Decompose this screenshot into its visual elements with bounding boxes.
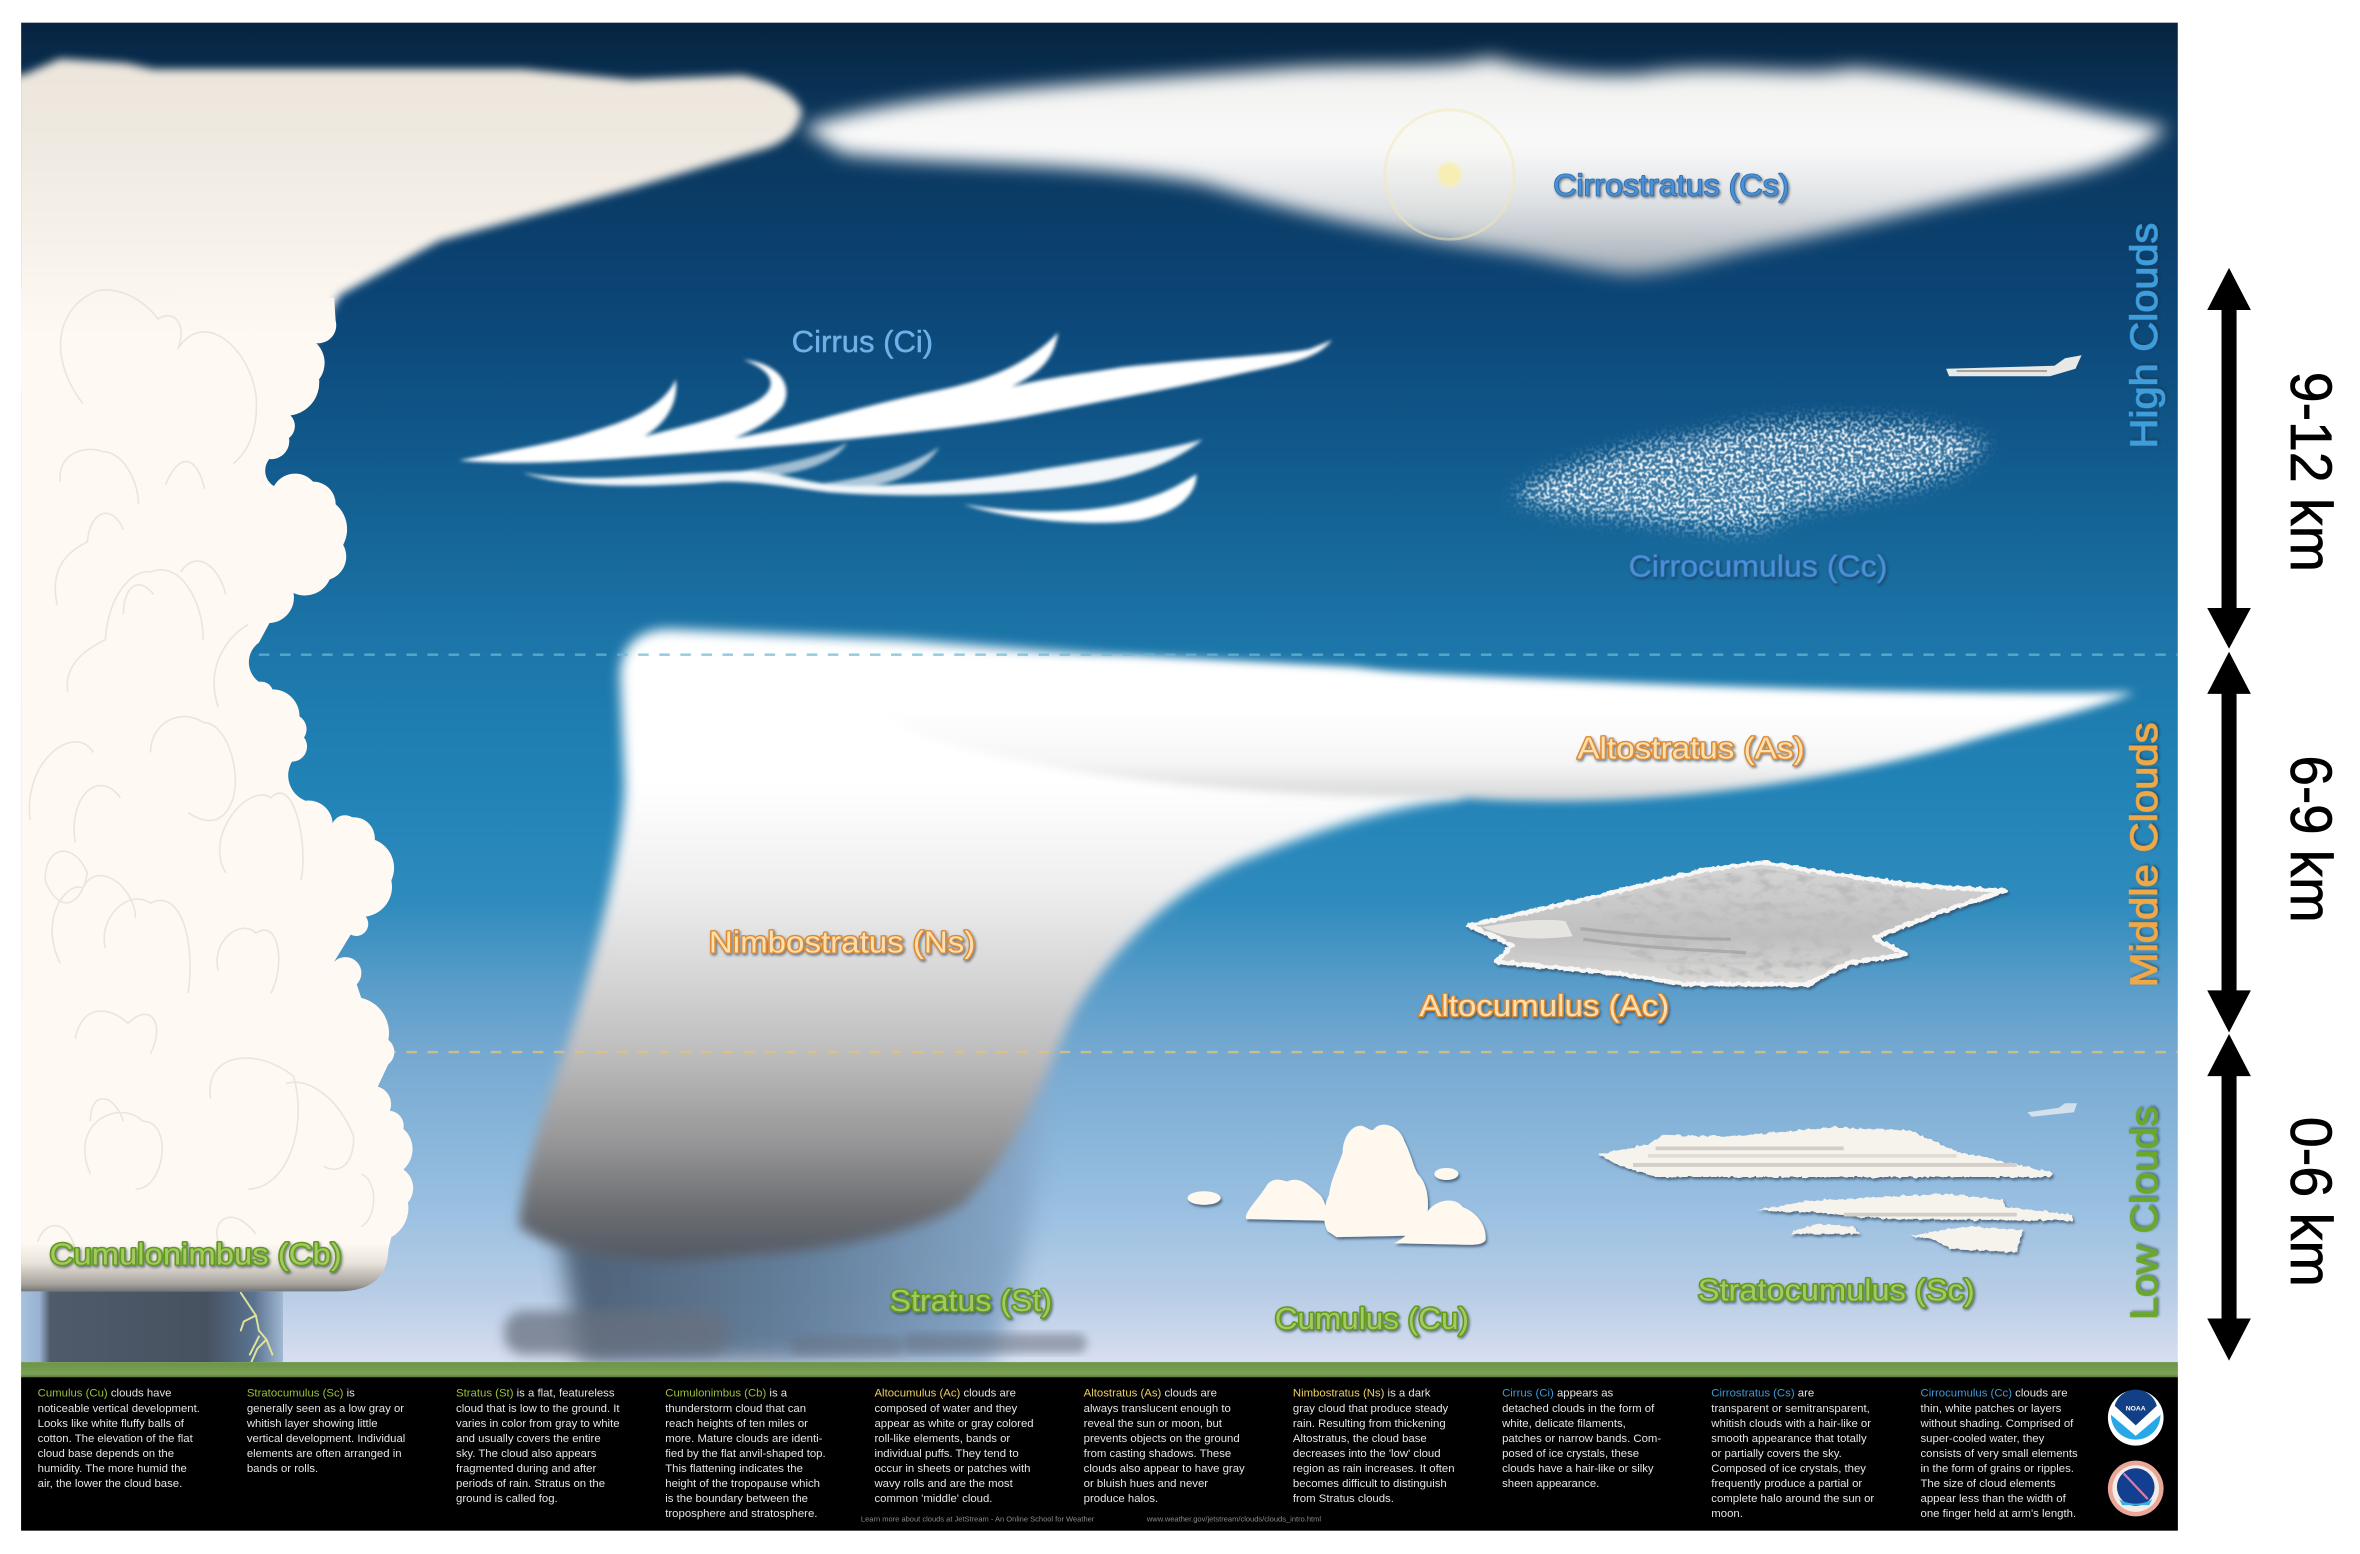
text: Cumulonimbus: height of the tropopause which <box>665 1478 820 1490</box>
text: Altostratus: always translucent enough to <box>1084 1403 1231 1415</box>
text: Cumulonimbus: This flattening indicates the <box>665 1463 803 1475</box>
cirrocumulus cloud <box>1513 420 1987 530</box>
text: Cumulus: cotton. The elevation of the flat <box>38 1433 194 1445</box>
text: Cumulonimbus: fied by the flat anvil-shaped top. <box>665 1448 826 1460</box>
text: Cirrostratus: Cirrostratus (Cs) <box>1711 1388 1795 1400</box>
text: Cirrus: clouds have a hair-like or silky <box>1502 1463 1654 1475</box>
text: Nimbostratus: Altostratus, the cloud base <box>1293 1433 1427 1445</box>
text: Nimbostratus: region as rain increases. It often <box>1293 1463 1455 1475</box>
text: Stratocumulus: generally seen as a low gray or <box>247 1403 404 1415</box>
label: 0-6 km: 0-6 km <box>2278 1117 2343 1287</box>
text: Stratus: and usually covers the entire <box>456 1433 601 1445</box>
text: Nimbostratus: from Stratus clouds. <box>1293 1493 1394 1505</box>
text: Cirrus: patches or narrow bands. Com- <box>1502 1433 1661 1445</box>
icon: NOAA logo <box>2108 1390 2164 1446</box>
cirrus cloud <box>459 333 1332 523</box>
text: Stratus: ground is called fog. <box>456 1493 558 1505</box>
stratus wisps <box>504 1311 1087 1355</box>
label: Cumulonimbus: Cumulonimbus (Cb) <box>50 1238 342 1271</box>
label: Low Clouds: Low Clouds <box>2123 1106 2165 1320</box>
small puff left <box>1188 1191 1221 1205</box>
cumulonimbus tower <box>0 286 413 1291</box>
text: Cumulus: noticeable vertical development. <box>38 1403 200 1415</box>
label: Cirrus: Cirrus (Ci) <box>792 326 933 359</box>
base shading band <box>21 1249 388 1292</box>
text: Cirrocumulus: in the form of grains or ripples. <box>1921 1463 2074 1475</box>
text: Nimbostratus: decreases into the 'low' cloud <box>1293 1448 1441 1460</box>
text: Cumulus: humidity. The more humid the <box>38 1463 187 1475</box>
label: Nimbostratus: Nimbostratus (Ns) <box>709 927 975 960</box>
text: Cumulonimbus: is a <box>766 1388 788 1400</box>
icon: small airplane <box>2027 1103 2077 1117</box>
cirrostratus cloud <box>802 57 2167 274</box>
text: Cirrocumulus: The size of cloud elements <box>1921 1478 2056 1490</box>
arrow: 0-6 km range <box>2207 1034 2251 1361</box>
text: Stratus: is a flat, featureless <box>514 1388 615 1400</box>
text: Cirrus: white, delicate filaments, <box>1501 1418 1626 1430</box>
text: Altocumulus: common 'middle' cloud. <box>874 1493 992 1505</box>
text: Cumulonimbus: is the boundary between the <box>665 1493 808 1505</box>
text: Cumulus: clouds have <box>108 1388 172 1400</box>
billow outlines <box>29 290 374 1249</box>
nimbostratus cloud <box>519 629 1505 1261</box>
cumulonimbus anvil <box>0 59 802 391</box>
text: Cumulonimbus: reach heights of ten miles or <box>665 1418 808 1430</box>
central tower <box>1324 1125 1428 1237</box>
text: Altocumulus: individual puffs. They tend to <box>874 1448 1019 1460</box>
text: Altocumulus: occur in sheets or patches with <box>874 1463 1030 1475</box>
label: Cumulus: Cumulus (Cu) <box>1275 1303 1469 1336</box>
text: Cirrostratus: smooth appearance that totally <box>1711 1433 1867 1445</box>
text: Altostratus: reveal the sun or moon, but <box>1084 1418 1223 1430</box>
text: Stratus: varies in color from gray to white <box>456 1418 620 1430</box>
dashed line: middle and low boundary <box>27 1051 2178 1053</box>
text: Stratus: sky. The cloud also appears <box>456 1448 597 1460</box>
text: Stratocumulus: vertical development. Individual <box>247 1433 405 1445</box>
panel: cloud descriptions <box>21 1377 2178 1531</box>
text: Altocumulus: composed of water and they <box>874 1403 1017 1415</box>
icon: lightning bolt <box>241 1293 272 1362</box>
dashed line: high and middle boundary <box>27 654 2178 656</box>
text: Altostratus: from casting shadows. These <box>1084 1448 1231 1460</box>
description background <box>21 1377 2178 1531</box>
label: Altostratus: Altostratus (As) <box>1577 733 1805 766</box>
text: Cirrostratus: frequently produce a partial or <box>1711 1478 1862 1490</box>
cumulonimbus dark base <box>21 1291 283 1362</box>
text: Cumulus: Looks like white fluffy balls of <box>38 1418 185 1430</box>
text: Cirrus: Cirrus (Ci) <box>1502 1388 1554 1400</box>
text: Altocumulus: Altocumulus (Ac) <box>874 1388 961 1400</box>
text: Altocumulus: wavy rolls and are the most <box>873 1478 1014 1490</box>
arrow: 9-12 km range <box>2207 268 2251 649</box>
text: Cirrostratus: are <box>1795 1388 1814 1400</box>
sky background <box>21 23 2178 1362</box>
stratocumulus clouds <box>1598 1127 2073 1252</box>
text: Cirrocumulus: Cirrocumulus (Cc) <box>1921 1388 2012 1400</box>
text: Nimbostratus: rain. Resulting from thickening <box>1293 1418 1446 1430</box>
label: Stratocumulus: Stratocumulus (Sc) <box>1698 1274 1975 1307</box>
label: High Clouds: High Clouds <box>2123 223 2165 449</box>
icon: National Weather Service logo <box>2108 1461 2164 1516</box>
label: Altocumulus: Altocumulus (Ac) <box>1419 990 1669 1023</box>
text: Stratocumulus: elements are often arranged in <box>247 1448 402 1460</box>
left cumulus <box>1246 1180 1326 1221</box>
text: Cirrostratus: complete halo around the sun or <box>1711 1493 1874 1505</box>
text: Stratocumulus: Stratocumulus (Sc) <box>247 1388 344 1400</box>
text: Cirrostratus: whitish clouds with a hair-like or <box>1710 1418 1871 1430</box>
text: Altostratus: Altostratus (As) <box>1084 1388 1162 1400</box>
text: Altostratus: prevents objects on the ground <box>1084 1433 1240 1445</box>
text: Cumulus: Cumulus (Cu) <box>38 1388 108 1400</box>
text: Stratus: fragmented during and after <box>456 1463 596 1475</box>
text: Altostratus: clouds also appear to have gray <box>1084 1463 1245 1475</box>
text: Nimbostratus: gray cloud that produce steady <box>1293 1403 1449 1415</box>
right cumulus <box>1394 1201 1486 1245</box>
text: Nimbostratus: becomes difficult to distinguish <box>1293 1478 1447 1490</box>
text: Altocumulus: roll-like elements, bands or <box>874 1433 1010 1445</box>
text: Cirrocumulus: clouds are <box>2012 1388 2068 1400</box>
text: Cumulonimbus: Cumulonimbus (Cb) <box>665 1388 766 1400</box>
text: Cumulonimbus: more. Mature clouds are identi- <box>665 1433 823 1445</box>
text: Nimbostratus: Nimbostratus (Ns) <box>1293 1388 1385 1400</box>
label: Middle Clouds: Middle Clouds <box>2123 722 2165 987</box>
text: Altocumulus: clouds are <box>960 1388 1016 1400</box>
text: Altocumulus: appear as white or gray colored <box>874 1418 1034 1430</box>
altostratus cloud <box>888 658 2134 801</box>
text: Cirrostratus: transparent or semitransparent, <box>1711 1403 1870 1415</box>
text: Stratocumulus: bands or rolls. <box>247 1463 318 1475</box>
text: Altostratus: or bluish hues and never <box>1084 1478 1208 1490</box>
cumulus clouds <box>1188 1125 1486 1245</box>
small puff right <box>1434 1168 1458 1180</box>
text: Cirrus: sheen appearance. <box>1502 1478 1599 1490</box>
text: Stratocumulus: is <box>343 1388 355 1400</box>
arrow: 6-9 km range <box>2207 652 2251 1032</box>
icon: jet airliner <box>1946 355 2082 376</box>
text: Stratus: periods of rain. Stratus on the <box>456 1478 605 1490</box>
text: learn more link: Learn more about clouds at JetStream - An Online School for Weather <box>861 1515 1095 1524</box>
text: Cirrostratus: Composed of ice crystals, they <box>1711 1463 1866 1475</box>
text: Altostratus: produce halos. <box>1084 1493 1158 1505</box>
panel: sky scene <box>0 23 2178 1362</box>
text: Cirrocumulus: super-cooled water, they <box>1921 1433 2045 1445</box>
text: Cirrus: appears as <box>1554 1388 1614 1400</box>
rain shaft under nimbostratus <box>546 1112 1040 1362</box>
label: 6-9 km: 6-9 km <box>2278 756 2343 923</box>
text: Nimbostratus: is a dark <box>1384 1388 1431 1400</box>
text: learn more link: www.weather.gov/jetstream/clouds/clouds_intro.html <box>1146 1515 1321 1524</box>
text: Cirrostratus: or partially covers the sky. <box>1711 1448 1842 1460</box>
text: Cirrocumulus: without shading. Comprised of <box>1920 1418 2074 1430</box>
label: Cirrostratus: Cirrostratus (Cs) <box>1553 170 1790 203</box>
text: Cirrocumulus: appear less than the width of <box>1921 1493 2067 1505</box>
text: Cumulonimbus: troposphere and stratosphere. <box>665 1508 817 1520</box>
altocumulus cloud <box>1469 862 2005 984</box>
text: Cirrocumulus: thin, white patches or layers <box>1921 1403 2062 1415</box>
icon: NOAA logo: NOAA <box>2126 1405 2146 1412</box>
text: Cirrocumulus: one finger held at arm's length. <box>1921 1508 2076 1520</box>
text: Altostratus: clouds are <box>1161 1388 1217 1400</box>
label: 9-12 km: 9-12 km <box>2278 372 2343 572</box>
label: Cirrocumulus: Cirrocumulus (Cc) <box>1629 550 1887 583</box>
ground strip <box>21 1362 2178 1377</box>
label: Stratus: Stratus (St) <box>890 1285 1052 1318</box>
text: Cirrus: posed of ice crystals, these <box>1502 1448 1639 1460</box>
text: Cirrus: detached clouds in the form of <box>1502 1403 1655 1415</box>
cloud name labels <box>50 170 1975 1336</box>
icon: sun halo <box>1385 110 1514 239</box>
text: Stratus: Stratus (St) <box>456 1388 514 1400</box>
text: Stratus: cloud that is low to the ground. It <box>456 1403 620 1415</box>
stratocumulus shading <box>1633 1148 2017 1215</box>
text: Stratocumulus: whitish layer showing little <box>246 1418 378 1430</box>
text: Cirrostratus: moon. <box>1711 1508 1743 1520</box>
text: Cirrocumulus: consists of very small elements <box>1921 1448 2078 1460</box>
text: Cumulonimbus: thunderstorm cloud that can <box>665 1403 806 1415</box>
text: Cumulus: air, the lower the cloud base. <box>38 1478 182 1490</box>
text: Cumulus: cloud base depends on the <box>38 1448 174 1460</box>
